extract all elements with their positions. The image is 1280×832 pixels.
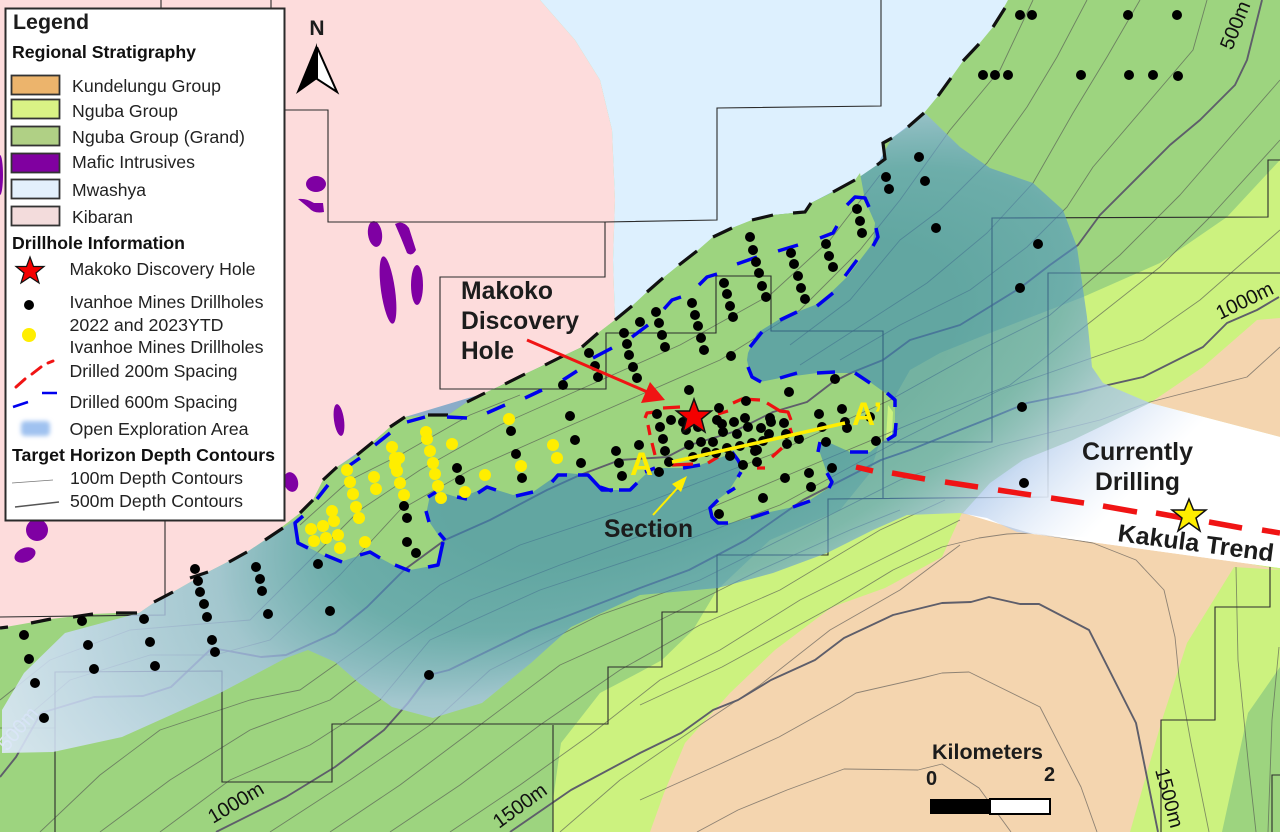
contact boundary dashes — [0, 8, 1005, 628]
label: Makoko Discovery Hole: Discovery — [461, 308, 579, 335]
north arrow: N — [309, 17, 325, 40]
legend swatch: Nguba Group (Grand): Nguba Group (Grand) — [72, 127, 245, 147]
legend heading: Target Horizon Depth Contours: Target Horizon Depth Contours — [12, 445, 275, 465]
legend item: open exploration area: Open Exploration Area — [70, 419, 249, 439]
legend item: Ivanhoe drillholes: Ivanhoe Mines Drillholes — [70, 292, 264, 312]
legend panel — [6, 8, 284, 520]
label: Kakula Trend: Kakula Trend — [1116, 520, 1275, 567]
Kakula trend corridor — [963, 403, 1280, 568]
contour label 1000m bottom: 1000m — [204, 778, 268, 828]
legend item: 500m contours: 500m Depth Contours — [70, 491, 243, 511]
lime sliver — [886, 405, 893, 440]
geology: Nguba Group — [553, 160, 1280, 832]
legend swatch: Kundelungu Group — [12, 76, 221, 96]
section label A: A — [630, 446, 653, 482]
legend item: 600m spacing: Drilled 600m Spacing — [70, 392, 238, 412]
red arrow to discovery hole — [527, 340, 665, 403]
label: Currently Drilling — [1082, 438, 1193, 496]
geology: Kundelungu upper right — [1150, 318, 1280, 437]
black drillholes — [19, 10, 1183, 723]
legend swatch: Nguba Group — [12, 100, 178, 121]
legend heading: Regional Stratigraphy: Regional Stratigraphy — [12, 42, 196, 62]
legend item: discovery hole: Makoko Discovery Hole — [70, 259, 256, 279]
label: Currently Drilling: Currently — [1082, 438, 1193, 466]
contour label 1500m bottom: 1500m — [489, 779, 551, 832]
icon: currently drilling star — [1172, 499, 1206, 531]
legend swatch: Mafic Intrusives: Mafic Intrusives — [72, 152, 195, 172]
scale bar: 2 — [1044, 764, 1055, 786]
legend item: 2022 and 2023YTD drillholes — [22, 315, 264, 357]
north arrow — [296, 17, 337, 94]
open exploration area — [2, 113, 1210, 753]
legend swatch: Nguba Group: Nguba Group — [72, 101, 178, 121]
label: Section: Section — [604, 516, 693, 543]
legend title: Legend — [13, 10, 89, 34]
icon: Makoko discovery star — [676, 399, 712, 432]
drilled 600m spacing boundary — [295, 197, 896, 571]
yellow section arrow — [653, 476, 687, 515]
drilled area patch — [295, 173, 895, 570]
legend item: discovery hole — [16, 257, 256, 283]
scale bar: Kilometers — [932, 740, 1043, 764]
geology: Kundelungu main — [650, 513, 1280, 832]
geology: darker green bottom right — [1222, 667, 1280, 832]
corridor fade to white — [963, 403, 1280, 568]
legend heading: Drillhole Information: Drillhole Information — [12, 233, 185, 253]
label: Makoko Discovery Hole: Makoko — [461, 278, 553, 305]
label: Makoko Discovery Hole — [461, 278, 579, 365]
legend swatch: Mafic Intrusives — [12, 152, 195, 172]
legend swatch: Kibaran: Kibaran — [72, 207, 133, 227]
contour label 1000m right: 1000m — [1213, 278, 1277, 324]
section label A': A’ — [852, 396, 882, 432]
label: Makoko Discovery Hole: Hole — [461, 338, 514, 365]
legend swatch: Mwashya: Mwashya — [72, 180, 146, 200]
mafic intrusives — [0, 155, 423, 566]
legend item: 2022 and 2023YTD drillholes: Ivanhoe Mines Drillholes — [70, 337, 264, 357]
scale bar — [926, 740, 1055, 814]
legend swatch: Kundelungu Group: Kundelungu Group — [72, 76, 221, 96]
legend swatch: Kibaran — [12, 206, 133, 227]
geology: Mwashya — [540, 0, 1008, 320]
legend swatch: Mwashya — [12, 180, 146, 200]
yellow 2022 and 2023YTD drillholes — [305, 413, 563, 554]
legend item: 200m spacing: Drilled 200m Spacing — [70, 361, 238, 381]
section line A to A' — [672, 423, 845, 462]
legend item: 100m contours: 100m Depth Contours — [70, 468, 243, 488]
drilled 200m spacing boundary — [645, 399, 792, 468]
legend item: 2022 and 2023YTD drillholes: 2022 and 2023YTD — [70, 315, 224, 335]
contour label 1500m right: 1500m — [1150, 766, 1187, 830]
legend item: 200m spacing — [16, 361, 238, 387]
scale bar: 0 — [926, 768, 937, 790]
label: Currently Drilling: Drilling — [1095, 468, 1180, 496]
geology: Kibaran — [0, 0, 615, 628]
contours and tenement lines over drilled area — [300, 195, 892, 568]
Kakula trend dashed line — [856, 467, 1280, 533]
